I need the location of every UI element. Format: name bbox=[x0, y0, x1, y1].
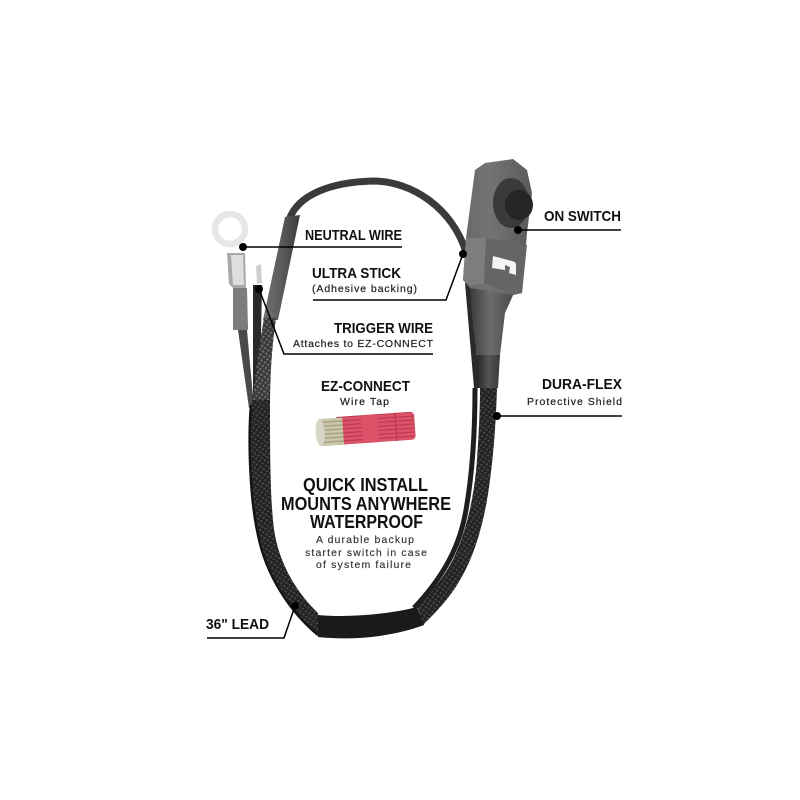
callout: dura-flex bbox=[493, 376, 622, 420]
ultra stick heat-shrink sleeve bbox=[263, 215, 300, 320]
callout: ultra stick bbox=[312, 250, 467, 300]
label: EZ-Connect: Wire Tap bbox=[340, 396, 389, 408]
icon: recessed button bbox=[493, 178, 533, 228]
callout: neutral wire bbox=[239, 227, 402, 251]
trigger wire bbox=[253, 264, 262, 405]
text block: features: starter switch in case bbox=[305, 547, 427, 559]
callout: neutral wire: NEUTRAL WIRE bbox=[305, 227, 402, 244]
callout: 36 inch lead: 36" LEAD bbox=[206, 616, 269, 633]
callout: trigger wire bbox=[255, 285, 434, 354]
front face bbox=[484, 238, 527, 295]
wire strip beside neck bbox=[465, 283, 480, 388]
tube bbox=[477, 355, 500, 388]
callout: dura-flex: DURA-FLEX bbox=[542, 376, 622, 393]
label: EZ-Connect bbox=[321, 378, 410, 408]
icon: n logo bbox=[492, 256, 516, 275]
neutral wire arc bbox=[289, 181, 466, 252]
callout: trigger wire: Attaches to EZ-CONNECT bbox=[293, 338, 434, 350]
dura-flex braided loop bbox=[250, 318, 497, 635]
text block: features: MOUNTS ANYWHERE bbox=[281, 494, 451, 514]
bottom heat-shrink sleeve bbox=[318, 607, 424, 638]
left ring terminal bbox=[215, 214, 254, 408]
product: wire harness bbox=[215, 181, 497, 638]
text block: features: QUICK INSTALL bbox=[303, 475, 428, 495]
text block: features: of system failure bbox=[316, 559, 411, 571]
text block: features: WATERPROOF bbox=[310, 512, 423, 532]
connector: EZ-Connect wire tap bbox=[315, 412, 416, 446]
callout: trigger wire: TRIGGER WIRE bbox=[334, 320, 433, 337]
text block: features: A durable backup bbox=[316, 534, 414, 546]
left face bbox=[463, 238, 486, 286]
callout: ultra stick: (Adhesive backing) bbox=[312, 283, 417, 295]
inner black wire bbox=[414, 388, 475, 608]
callout: dura-flex: Protective Shield bbox=[527, 396, 622, 408]
text block: features bbox=[281, 475, 451, 571]
label: EZ-Connect: EZ-CONNECT bbox=[321, 378, 410, 395]
callout: on switch bbox=[514, 208, 621, 234]
neck bbox=[470, 288, 514, 355]
switch housing bbox=[463, 159, 533, 388]
callout: ultra stick: ULTRA STICK bbox=[312, 265, 401, 282]
callout: on switch: ON SWITCH bbox=[544, 208, 621, 225]
callout: 36 inch lead bbox=[206, 602, 299, 638]
